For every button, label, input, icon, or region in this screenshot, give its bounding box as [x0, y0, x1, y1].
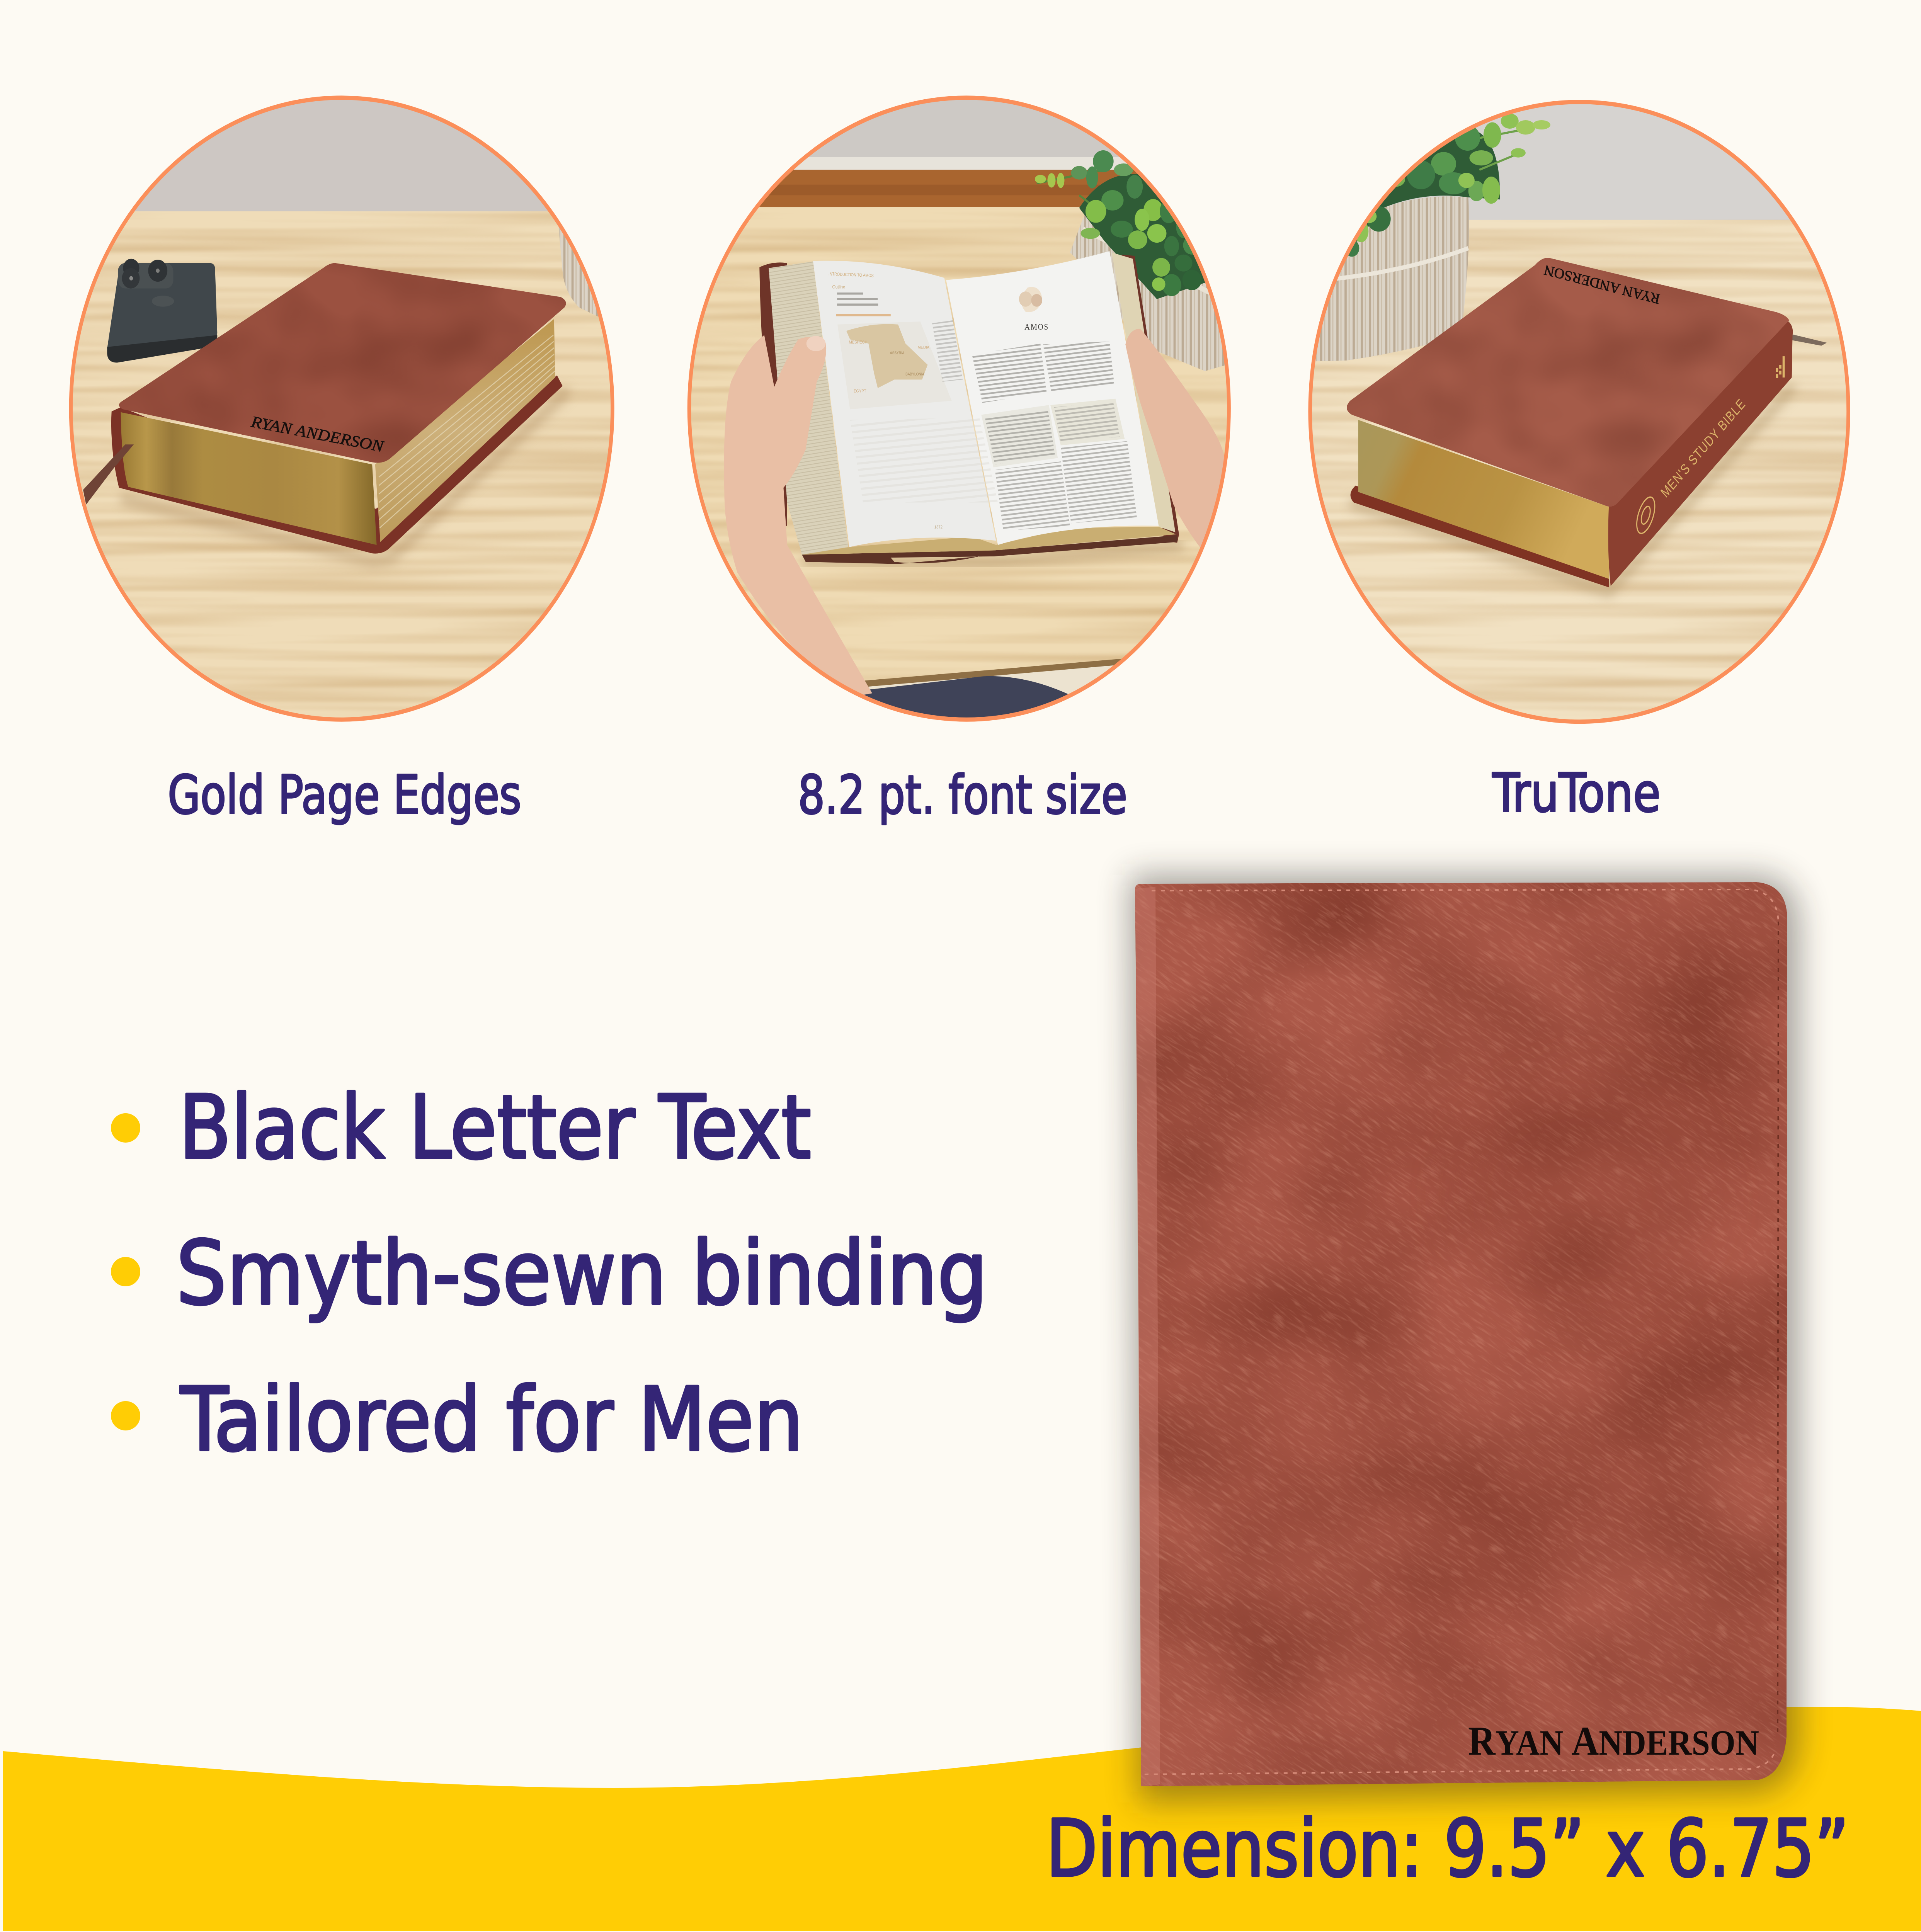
page block side	[375, 319, 555, 542]
left hand and arm	[724, 335, 872, 697]
ribbon	[1792, 334, 1827, 346]
spine strip	[1135, 887, 1160, 1786]
bullet 3	[111, 1401, 140, 1430]
large leather book cover	[1135, 882, 1787, 1786]
orange frame	[71, 98, 613, 719]
wall	[1295, 85, 1874, 221]
feature: Smyth-sewn binding: Smyth-sewn binding	[176, 1222, 988, 1325]
left page content: Outline	[832, 285, 845, 290]
caption: TruTone: TruTone	[1492, 762, 1661, 824]
table edge and shirt	[848, 658, 1157, 746]
dimension label: Dimension: 9.5” x 6.75”	[1046, 1803, 1849, 1895]
back cover	[111, 375, 563, 554]
right page content: AMOS	[1024, 323, 1049, 332]
map: ASSYRIA	[890, 351, 905, 355]
left page block	[769, 261, 848, 554]
wall and sill	[676, 85, 1256, 210]
map: MESHECH	[849, 340, 868, 345]
map: MEDIA	[918, 345, 929, 350]
plant pot	[1070, 199, 1227, 371]
spine	[1608, 318, 1793, 586]
back cover	[1351, 486, 1609, 587]
panel: TruTone cover photo	[1295, 85, 1874, 737]
feature: Black Letter Text: Black Letter Text	[179, 1076, 811, 1179]
right hand and arm	[1125, 329, 1224, 551]
left page content	[829, 272, 998, 530]
engraved name: RYAN ANDERSON	[250, 413, 385, 456]
left page content: 1372	[934, 525, 943, 530]
covers	[759, 262, 787, 526]
bullet 2	[111, 1257, 140, 1286]
map	[837, 321, 952, 409]
orange frame	[1310, 102, 1848, 722]
right page block	[1112, 252, 1175, 532]
feature: Tailored for Men: Tailored for Men	[180, 1368, 803, 1471]
embossed name: RYAN ANDERSON	[1468, 1718, 1759, 1764]
right page content	[972, 287, 1137, 531]
plant leaves	[1035, 150, 1207, 299]
panel: open book photo	[676, 85, 1256, 746]
gold front edge	[121, 412, 377, 545]
feature list	[111, 1076, 988, 1471]
wooden table	[73, 211, 611, 718]
spine title: MEN'S STUDY BIBLE	[1658, 395, 1748, 501]
map: BABYLONIA	[905, 372, 925, 376]
diagonal leather creases	[1135, 882, 1787, 1786]
plant leaves	[1344, 113, 1550, 257]
wooden table	[676, 207, 1256, 694]
left page content: INTRODUCTION TO AMOS	[829, 272, 874, 278]
cover top	[119, 263, 566, 463]
caption: 8.2 pt. font size: 8.2 pt. font size	[798, 764, 1127, 826]
map: EGYPT	[854, 389, 866, 394]
plant pot edge	[519, 167, 601, 318]
top and bottom stitching	[1144, 889, 1778, 1774]
right page	[946, 251, 1159, 545]
wooden table	[1295, 220, 1874, 737]
plant pot	[1315, 196, 1469, 361]
ribbon	[83, 444, 134, 505]
left page	[813, 261, 996, 547]
left thumbnail	[807, 336, 825, 351]
book shadow on table	[802, 545, 1183, 562]
yellow wave footer band	[3, 1707, 1921, 1931]
book 1	[83, 263, 566, 554]
book shadow on table	[1350, 386, 1793, 592]
open book	[759, 251, 1179, 564]
book 3	[1347, 258, 1793, 587]
caption: Gold Page Edges: Gold Page Edges	[168, 764, 521, 826]
gilded bottom edge	[802, 527, 1176, 554]
spine logo	[1633, 495, 1658, 536]
bullet 1	[111, 1113, 140, 1143]
cover top	[1347, 258, 1789, 507]
engraved name upside down: RYAN ANDERSON	[1543, 262, 1661, 307]
cover	[1135, 882, 1787, 1786]
dark patch	[1457, 1082, 1712, 1314]
book shadow on table	[121, 390, 568, 561]
gold edge	[1358, 420, 1609, 579]
panel: gold page edges photo	[69, 95, 614, 722]
publisher mark	[1776, 356, 1785, 378]
orange frame	[689, 98, 1229, 719]
book drop shadow	[1130, 875, 1799, 1803]
wall	[134, 100, 548, 211]
phone	[107, 259, 217, 363]
